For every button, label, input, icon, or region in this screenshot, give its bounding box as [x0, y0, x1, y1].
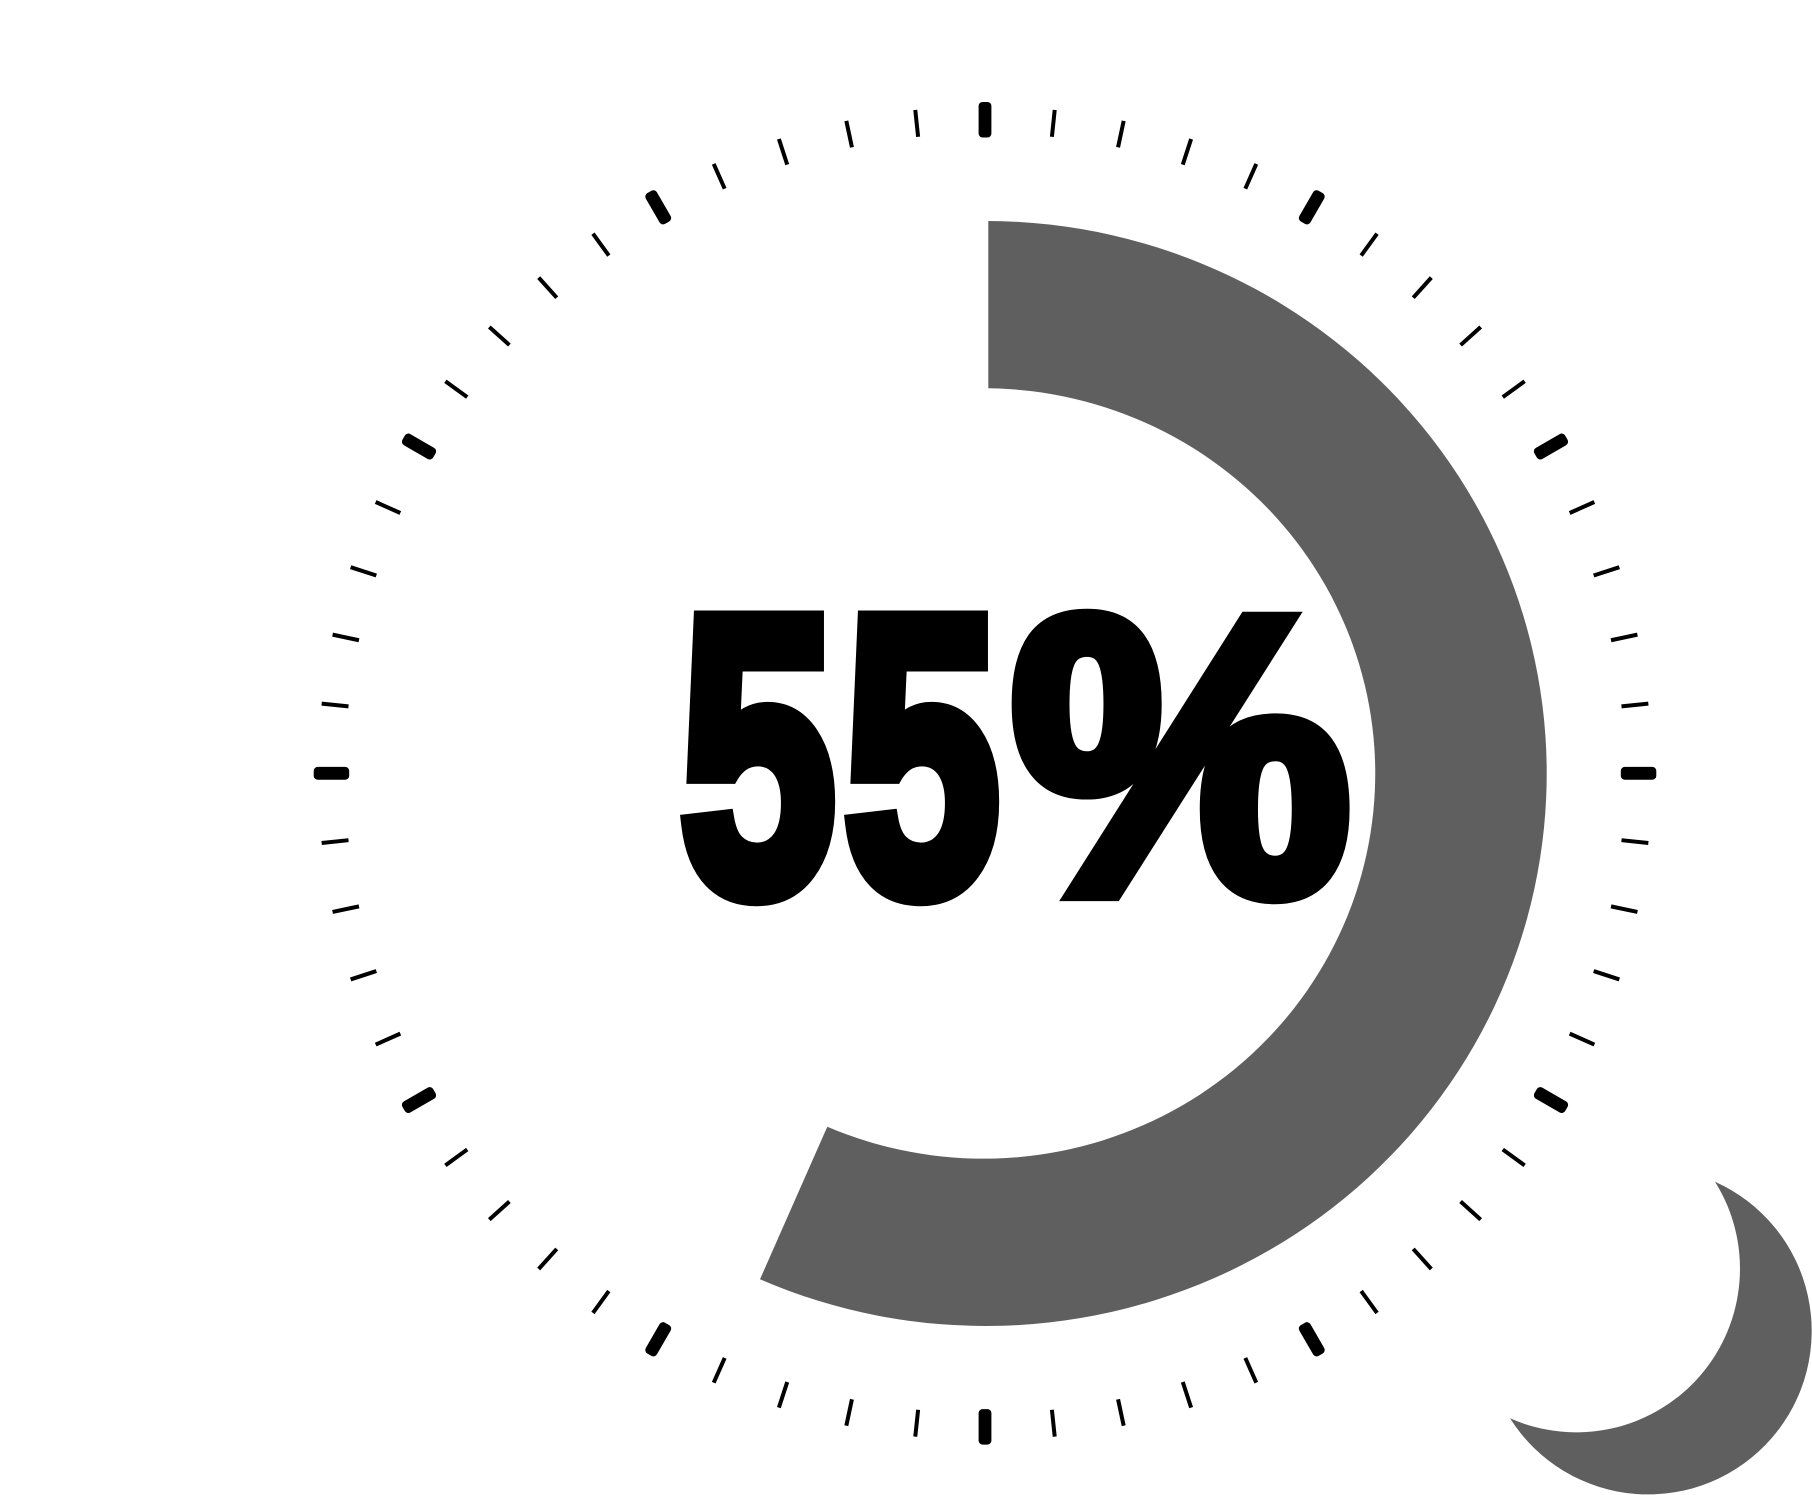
value label: 55%: 5 [680, 537, 836, 976]
crescent moon shape [1510, 1182, 1812, 1494]
value label: 55%: % [1011, 537, 1351, 976]
value label: 55%: 5 [844, 537, 1000, 976]
tick ring: 60 clock-style ticks [314, 102, 1656, 1445]
value label: 55% [680, 537, 1351, 976]
progress arc: 55% ring [760, 221, 1547, 1326]
